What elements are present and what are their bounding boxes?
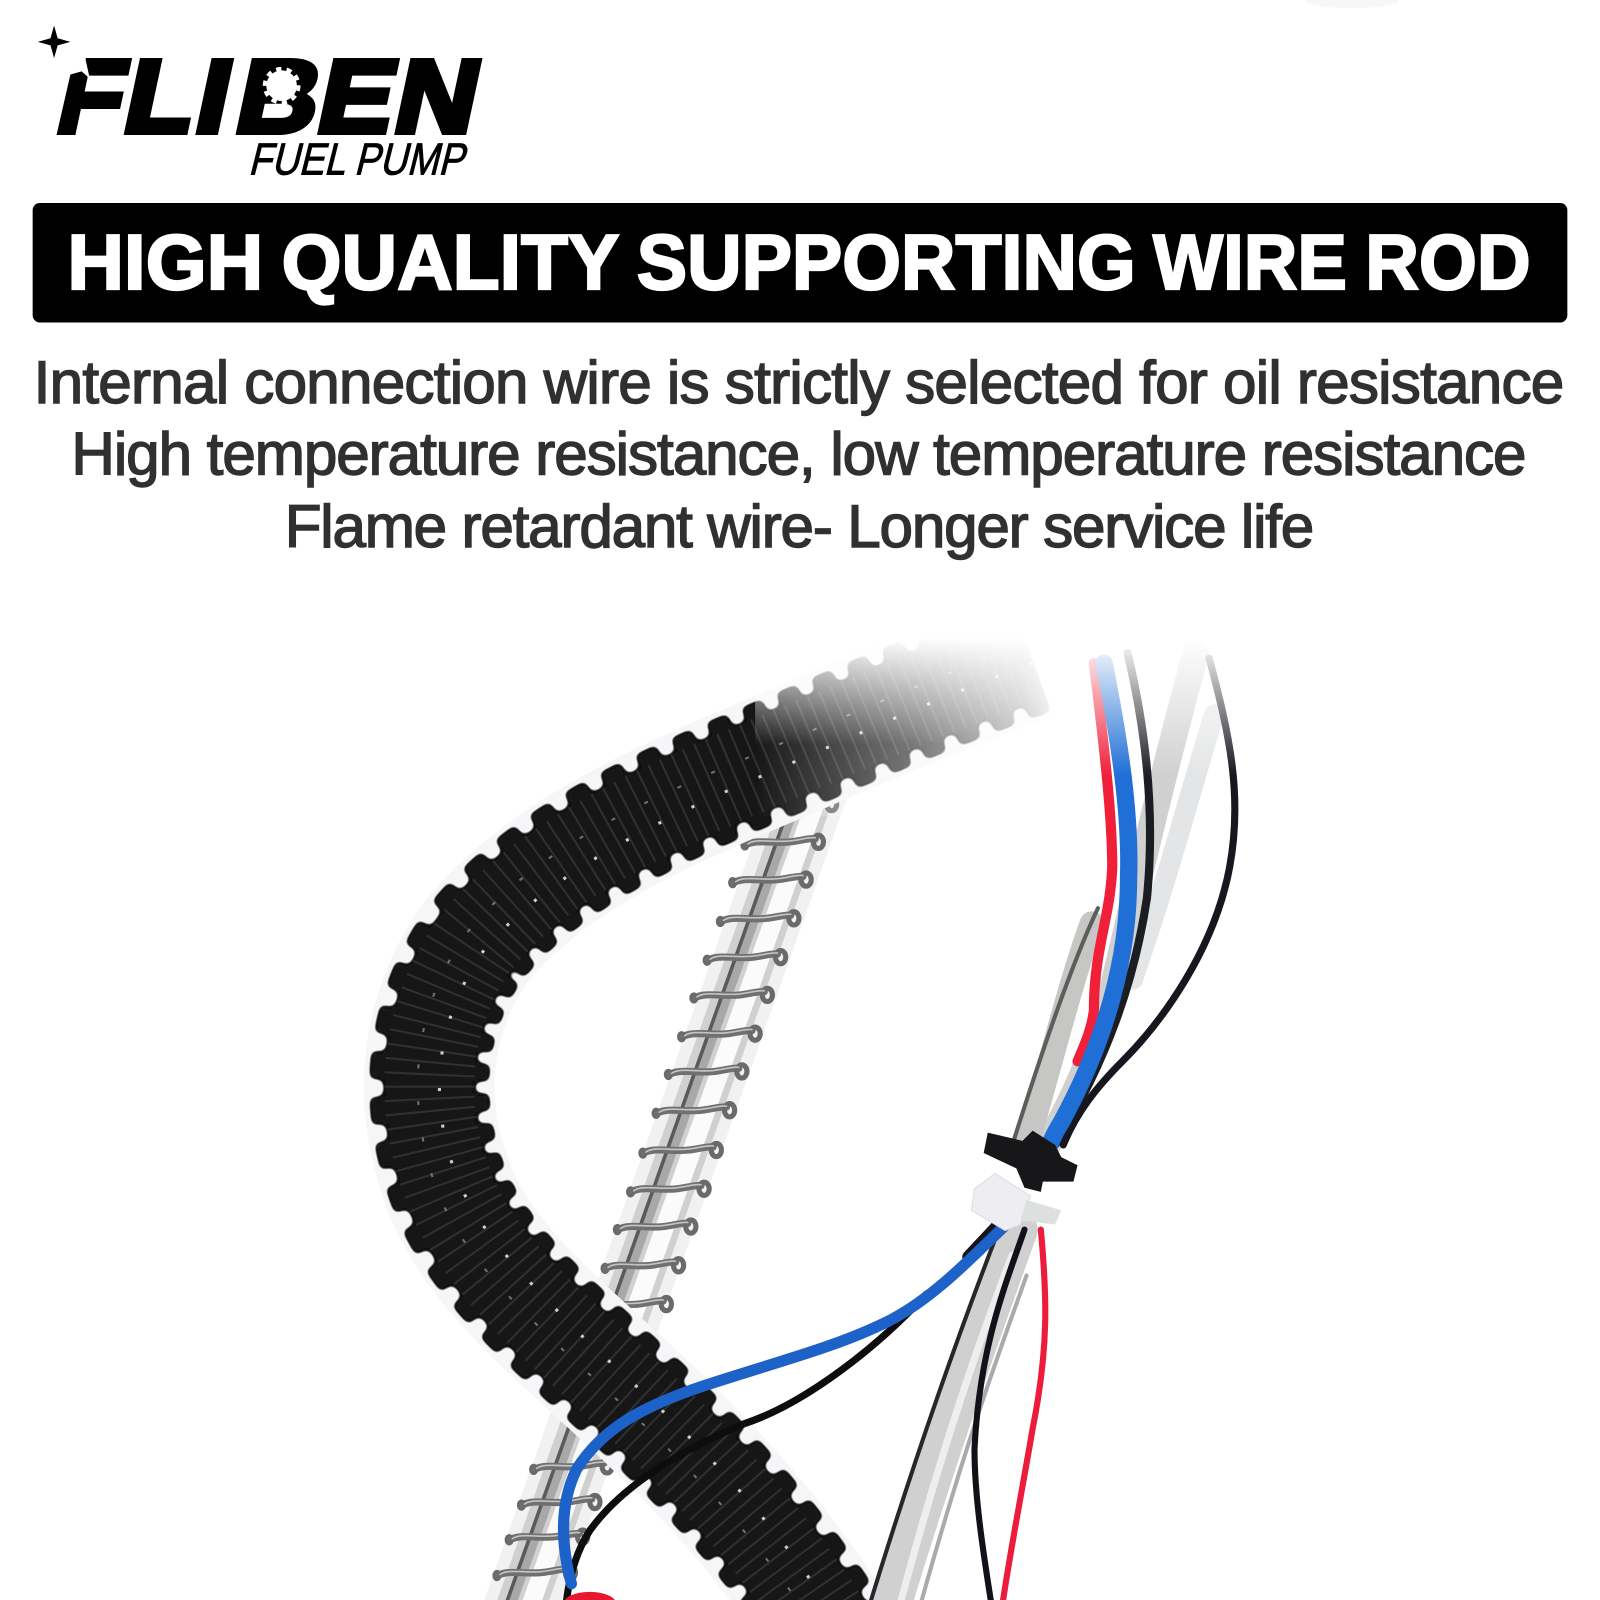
top fade band: [755, 571, 1102, 745]
upper wire bundle: [1014, 653, 1235, 1155]
product photo: wire harness: [418, 571, 1255, 1600]
faint top-right smudge: [1305, 0, 1399, 8]
wordmark: FUEL PUMP: FUEL PUMP: [246, 134, 473, 184]
logo gear cutout: [265, 69, 298, 102]
heading text: [67, 220, 1531, 306]
heading text: ROD: [1365, 220, 1531, 306]
black cable tie: [984, 1131, 1078, 1192]
banner background: [33, 203, 1567, 322]
brand logo: [38, 26, 491, 184]
upper wire fade: [1071, 633, 1255, 776]
description text block: High temperature resistance, low temperature resistance: [71, 420, 1527, 487]
conduit fade to white: [755, 571, 1102, 816]
heading text: WIRE: [1153, 220, 1347, 306]
description text block: Flame retardant wire- Longer service life: [285, 493, 1314, 560]
heading text: SUPPORTING: [637, 220, 1136, 306]
red wire end: [563, 1592, 616, 1600]
wordmark: FLIBEN: FLIBEN: [45, 39, 491, 154]
heading text: HIGH: [67, 220, 263, 306]
corrugated black conduit: [418, 645, 1033, 1600]
harness connector and cable tie: [971, 1131, 1078, 1231]
icon: four-point star: [38, 26, 70, 58]
lower wire bundle: [564, 1222, 1045, 1600]
heading text: QUALITY: [282, 220, 619, 306]
description text block: Internal connection wire is strictly selected for oil resistance: [34, 349, 1564, 416]
spring-wrapped steel rod: [494, 786, 837, 1600]
translucent sleeve: [1020, 1200, 1061, 1224]
white connector: [971, 1173, 1031, 1231]
logo F corner cut: [49, 49, 90, 137]
heading banner: [33, 203, 1567, 322]
description text block: [34, 349, 1564, 560]
